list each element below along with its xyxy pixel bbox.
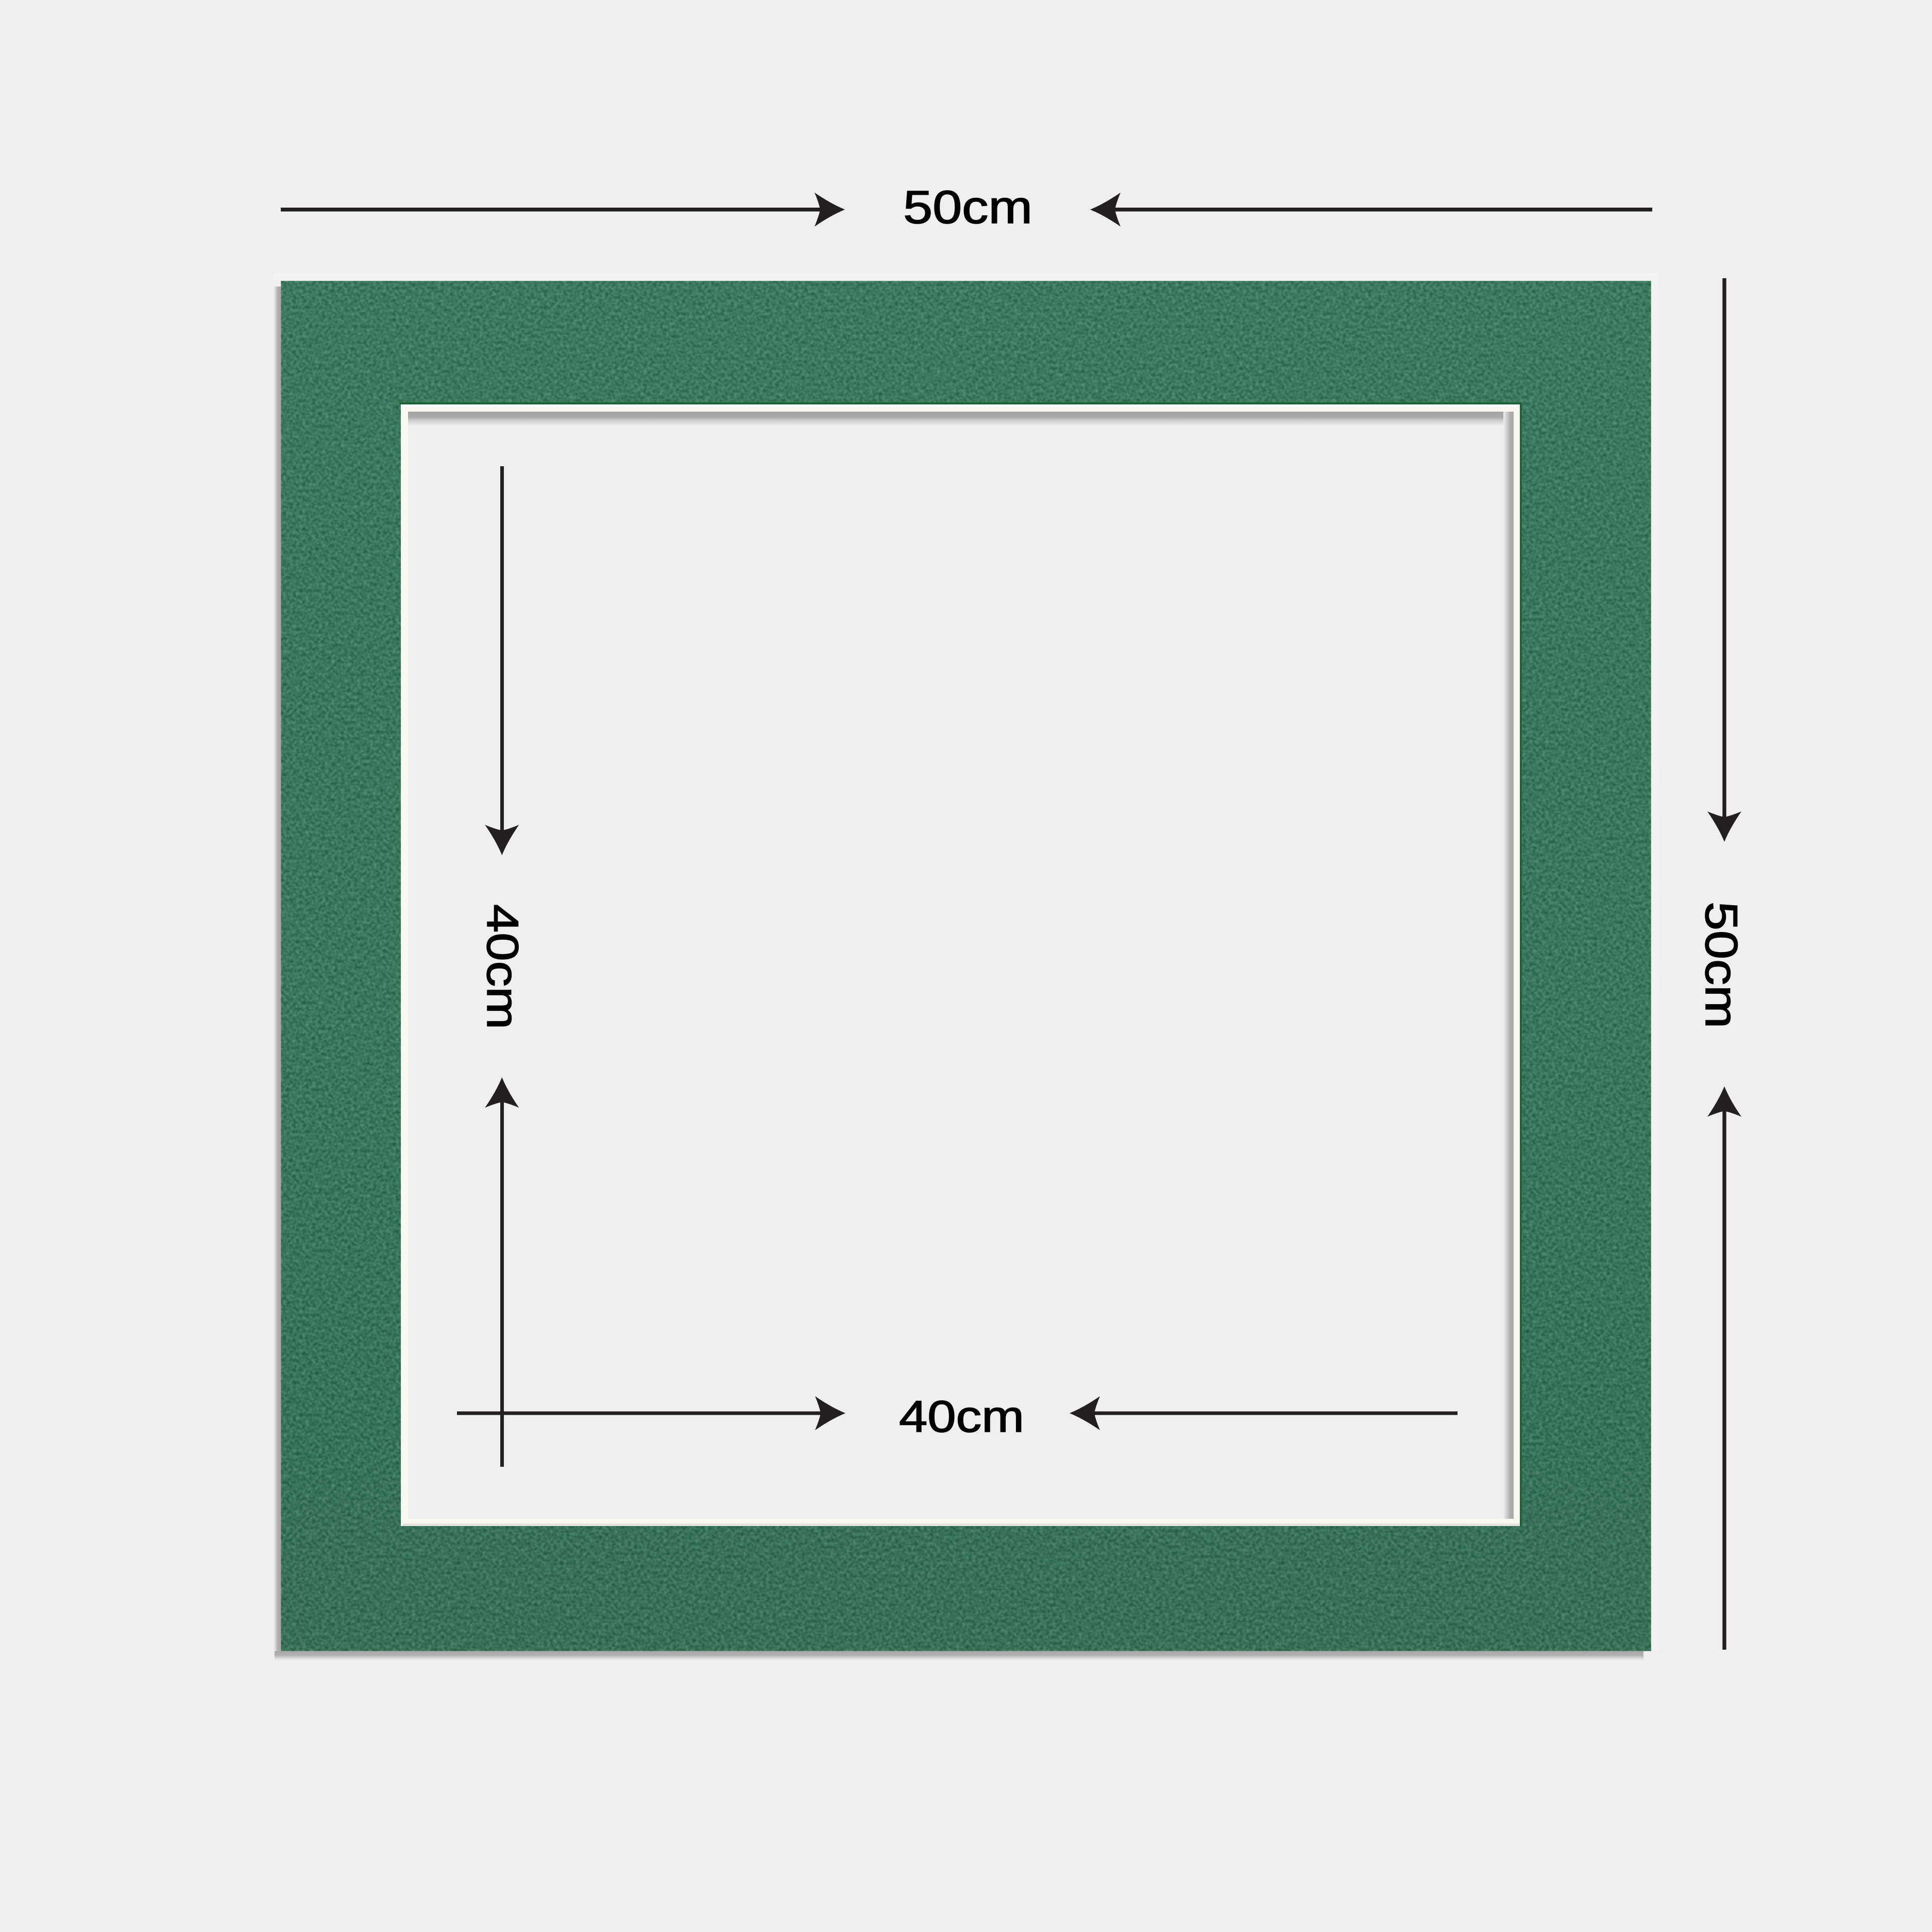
mat board with drop shadow bbox=[273, 273, 1659, 1660]
arrow: opening height top bbox=[485, 466, 519, 855]
arrow: opening width left bbox=[457, 1396, 845, 1430]
arrow: outer width right bbox=[1090, 193, 1652, 227]
label: 40cm width: 40cm bbox=[899, 1392, 1024, 1442]
arrow: opening width right bbox=[1070, 1396, 1458, 1430]
arrow: outer height bottom bbox=[1707, 1086, 1741, 1650]
window opening with bevel bbox=[399, 402, 1522, 1526]
dimension: outer height 50cm bbox=[1696, 278, 1747, 1650]
label: 40cm height: 40cm bbox=[478, 904, 527, 1029]
arrow: opening height bottom bbox=[485, 1077, 519, 1467]
label: 50cm width: 50cm bbox=[903, 182, 1032, 233]
dimension: outer width 50cm bbox=[281, 182, 1652, 233]
dimension: opening height 40cm bbox=[478, 466, 527, 1467]
arrow: outer height top bbox=[1707, 278, 1741, 842]
arrow: outer width left bbox=[281, 193, 845, 227]
dimension: opening width 40cm bbox=[457, 1392, 1458, 1442]
label: 50cm height: 50cm bbox=[1696, 902, 1747, 1028]
